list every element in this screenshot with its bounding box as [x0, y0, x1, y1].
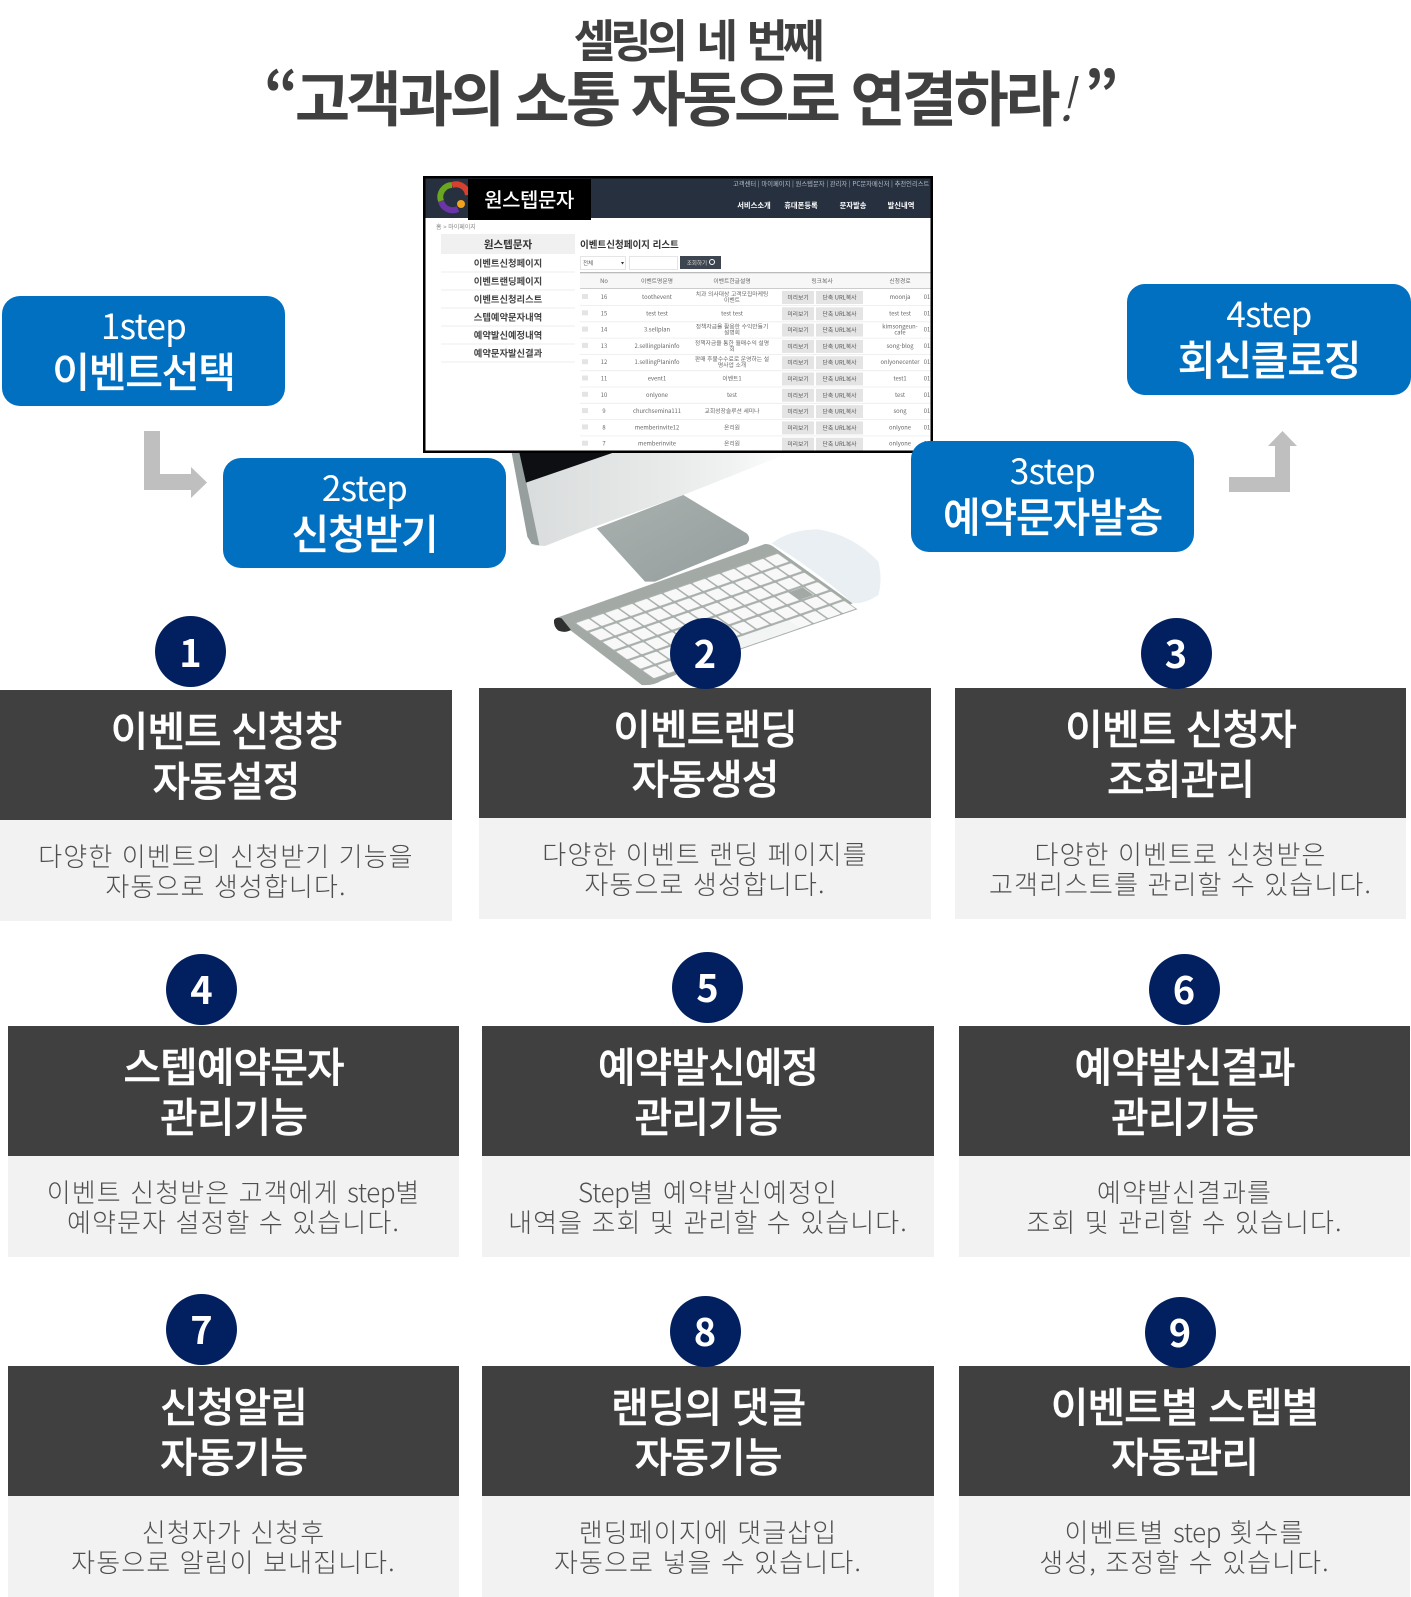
step 1 box: [2, 296, 285, 406]
sidebar: 이벤트신청리스트: [474, 292, 543, 306]
number badge 9: [1144, 1296, 1216, 1368]
breadcrumb: 홈 > 마이페이지: [436, 222, 476, 231]
heading 3: 이벤트 신청자: [1065, 696, 1296, 756]
main menu: 휴대폰등록: [784, 201, 818, 211]
heading 6: [959, 1026, 1410, 1156]
sidebar: 이벤트신청페이지: [474, 256, 542, 270]
heading 1: 자동설정: [153, 748, 299, 808]
feature card 9: [959, 1297, 1410, 1597]
number badge 2: [670, 618, 740, 688]
number badge 1: [155, 616, 226, 686]
main menu: 문자발송: [840, 201, 867, 211]
table rows: 단축 URL복사: [823, 309, 857, 318]
table rows: 미리보기: [787, 309, 809, 318]
table rows: 미리보기: [787, 390, 809, 399]
description 9: 생성, 조정할 수 있습니다.: [1039, 1543, 1330, 1580]
table rows: test1: [893, 374, 907, 382]
main menu: 발신내역: [888, 201, 914, 211]
table rows: 01: [924, 406, 930, 415]
step 4 box: 회신클로징: [1178, 327, 1360, 387]
logo label: [468, 179, 591, 220]
list heading: 이벤트신청페이지 리스트: [580, 237, 679, 251]
table rows: 11: [601, 374, 607, 382]
table rows: 판매 후불수수료로 운영하는 설: [695, 354, 769, 363]
feature card 5: [482, 952, 934, 1257]
heading 1: [0, 690, 452, 820]
header bar: [425, 178, 931, 220]
table rows: kimsongeun-: [882, 322, 918, 331]
description 4: [8, 1156, 459, 1257]
number badge 1: 1: [179, 622, 202, 678]
table rows: 01: [924, 439, 930, 448]
number badge 4: [166, 954, 237, 1024]
heading 4: [8, 1026, 459, 1156]
table rows: test: [727, 390, 738, 399]
table rows: 8: [602, 422, 606, 431]
description 6: [959, 1156, 1410, 1257]
logo label: 원스텝문자: [484, 184, 574, 213]
table rows: 온리원: [724, 422, 740, 431]
table rows: 온리원: [724, 439, 740, 448]
table header: 링크복사: [811, 276, 833, 285]
table rows: memberinvite: [638, 439, 676, 448]
step 3 box: 예약문자발송: [943, 484, 1162, 544]
number badge 3: [1140, 618, 1212, 688]
feature card 1: [0, 616, 452, 921]
mouse: [772, 529, 880, 603]
description 2: [479, 818, 931, 919]
step 2 box: [223, 458, 506, 568]
description 1: 다양한 이벤트의 신청받기 기능을: [38, 837, 414, 874]
table header: 이벤트명문명: [641, 276, 673, 285]
description 4: 이벤트 신청받은 고객에게 step별: [47, 1173, 420, 1210]
heading 2: 이벤트랜딩: [613, 696, 797, 756]
number badge 7: 7: [190, 1300, 213, 1354]
table rows: 단축 URL복사: [823, 439, 857, 448]
subtitle: 셀링의 네 번째: [574, 5, 819, 70]
table rows: 미리보기: [787, 341, 809, 350]
top links: 고객센터 | 마이페이지 | 원스텝문자 | 관리자 | PC문자메신저 | 추천인리스트: [733, 179, 930, 188]
description 4: 예약문자 설정할 수 있습니다.: [67, 1203, 400, 1240]
heading 7: [8, 1366, 459, 1496]
main menu: 서비스소개: [737, 201, 771, 211]
heading 8: 자동기능: [635, 1424, 781, 1484]
step 3 box: [911, 441, 1194, 552]
heading 4: 관리기능: [160, 1084, 307, 1144]
table rows: 15: [601, 308, 607, 317]
table header: [580, 272, 931, 289]
feature card 8: [482, 1296, 934, 1597]
number badge 2: 2: [694, 624, 716, 678]
table rows: 01: [924, 308, 930, 317]
heading 5: [482, 1026, 934, 1156]
description 6: 예약발신결과를: [1097, 1173, 1272, 1210]
table rows: 미리보기: [787, 292, 809, 302]
table rows: 치과 의사대상 고객모집마케팅: [696, 289, 768, 298]
table rows: 단축 URL복사: [823, 407, 857, 416]
number badge 6: [1148, 954, 1220, 1024]
table rows: test test: [721, 308, 744, 317]
sidebar: 예약문자발신결과: [474, 346, 543, 360]
heading 7: 신청알림: [160, 1374, 307, 1434]
arrow: step 3 to step 4: [1229, 431, 1297, 492]
table rows: 정책자금을 통한 월매수익 설명: [695, 338, 769, 347]
table rows: 2.sellingplaninfo: [635, 341, 680, 350]
heading 6: 관리기능: [1111, 1084, 1258, 1144]
icon: logo ring: [440, 184, 468, 210]
heading 3: [955, 688, 1406, 818]
monitor screen bezel: [519, 453, 613, 483]
description 7: 자동으로 알림이 보내집니다.: [71, 1543, 396, 1580]
title: [264, 5, 1115, 139]
table rows: 회: [729, 344, 735, 353]
heading 3: 조회관리: [1107, 746, 1254, 806]
table rows: 교회성장솔루션 세미나: [705, 406, 760, 415]
table rows: 16: [601, 292, 607, 301]
number badge 8: 8: [694, 1302, 716, 1356]
table rows: onlyonecenter: [880, 357, 920, 366]
table rows: 명사업 소개: [718, 360, 746, 369]
number badge 9: 9: [1169, 1302, 1191, 1358]
sidebar: 예약발신예정내역: [474, 328, 542, 342]
table rows: 7: [602, 439, 606, 448]
table rows: 01: [924, 357, 930, 366]
table rows: churchsemina111: [633, 406, 681, 415]
heading 7: 자동기능: [160, 1424, 307, 1484]
table rows: 설명회: [724, 328, 740, 337]
description 6: 조회 및 관리할 수 있습니다.: [1026, 1203, 1343, 1240]
screenshot: admin page: [423, 176, 933, 453]
table rows: 01: [924, 390, 930, 399]
table rows: 12: [601, 357, 607, 366]
table rows: 01: [924, 292, 930, 301]
description 7: [8, 1496, 459, 1597]
number badge 7: [166, 1294, 237, 1364]
step 1 box: 이벤트선택: [52, 339, 235, 399]
main menu: [737, 201, 914, 211]
feature card 7: [8, 1294, 459, 1597]
table rows: 13: [601, 341, 607, 350]
table rows: 미리보기: [787, 325, 809, 334]
description 3: 다양한 이벤트로 신청받은: [1034, 835, 1326, 872]
monitor stand: [597, 495, 749, 582]
feature card 2: [479, 618, 931, 919]
description 3: [955, 818, 1406, 919]
step 3 box: 3step: [1010, 444, 1095, 495]
table rows: test: [895, 390, 906, 399]
number badge 4: 4: [190, 960, 213, 1014]
feature card 3: [955, 618, 1406, 919]
table rows: test test: [646, 308, 669, 317]
table header: 신청경로: [889, 276, 911, 285]
description 9: 이벤트별 step 횟수를: [1064, 1513, 1305, 1550]
description 3: 고객리스트를 관리할 수 있습니다.: [989, 865, 1372, 902]
table rows: 1.sellingPlaninfo: [634, 357, 680, 366]
number badge 8: [670, 1296, 740, 1366]
heading 1: 이벤트 신청창: [111, 698, 341, 758]
description 9: [959, 1496, 1410, 1597]
heading 8: 랜딩의 댓글: [611, 1374, 805, 1434]
table rows: 미리보기: [787, 374, 809, 383]
table rows: 단축 URL복사: [823, 390, 857, 399]
table rows: 정책자금을 활용한 수익만들기: [696, 322, 768, 331]
description 7: 신청자가 신청후: [142, 1513, 325, 1550]
table rows: 이벤트: [724, 295, 741, 304]
step 2 box: 2step: [322, 461, 407, 512]
number badge 5: 5: [696, 958, 719, 1012]
step 4 box: [1127, 284, 1411, 395]
description 5: 내역을 조회 및 관리할 수 있습니다.: [508, 1203, 908, 1240]
table header: No: [600, 276, 608, 285]
table rows: 10: [601, 390, 607, 399]
table rows: memberinvite12: [635, 422, 679, 431]
table rows: 단축 URL복사: [823, 325, 857, 334]
illustration: desktop computer with keyboard and mouse: [512, 453, 880, 686]
sidebar: 이벤트랜딩페이지: [474, 274, 542, 288]
search controls: 조회하기: [687, 259, 707, 267]
table rows: 단축 URL복사: [823, 292, 857, 302]
table rows: 01: [924, 341, 930, 350]
table rows: song-blog: [886, 341, 914, 350]
heading 5: 관리기능: [635, 1084, 781, 1144]
table header: 이벤트한글설명: [713, 276, 751, 285]
table rows: 미리보기: [787, 407, 809, 416]
table rows: 01: [924, 422, 930, 431]
table rows: 단축 URL복사: [823, 341, 857, 350]
table rows: cafe: [894, 328, 906, 337]
heading 9: 자동관리: [1111, 1424, 1258, 1484]
feature card 4: [8, 954, 459, 1257]
table rows: 단축 URL복사: [823, 358, 857, 367]
number badge 3: 3: [1165, 624, 1187, 678]
heading 8: [482, 1366, 934, 1496]
heading 2: 자동생성: [632, 746, 778, 806]
table rows: 이벤트1: [722, 374, 742, 382]
description 8: [482, 1496, 934, 1597]
table rows: onlyone: [889, 439, 911, 448]
heading 9: [959, 1366, 1410, 1496]
table rows: onlyone: [646, 390, 668, 399]
heading 9: 이벤트별 스텝별: [1051, 1374, 1318, 1434]
heading 4: 스텝예약문자: [123, 1034, 344, 1094]
description 8: 랜딩페이지에 댓글삽입: [579, 1513, 837, 1550]
arrow: step 1 to step 2: [144, 431, 207, 498]
step 1 box: 1step: [101, 299, 186, 350]
sidebar: [441, 234, 575, 362]
table rows: 01: [924, 374, 930, 382]
description 1: 자동으로 생성합니다.: [105, 867, 347, 904]
table rows: 미리보기: [787, 423, 809, 432]
sidebar: 스텝예약문자내역: [474, 310, 542, 324]
number badge 5: [672, 952, 743, 1022]
description 5: [482, 1156, 934, 1257]
heading 5: 예약발신예정: [598, 1034, 818, 1094]
description 8: 자동으로 넣을 수 있습니다.: [554, 1543, 862, 1580]
sidebar: 원스텝문자: [484, 237, 532, 252]
table rows: 단축 URL복사: [823, 374, 857, 383]
table rows: 3.sellplan: [644, 325, 671, 334]
table rows: song: [893, 406, 907, 415]
step 2 box: 신청받기: [291, 501, 438, 561]
table rows: 9: [602, 406, 606, 415]
table rows: 01: [924, 325, 930, 334]
table rows: 14: [601, 325, 608, 334]
keyboard: [554, 544, 857, 685]
description 2: 다양한 이벤트 랜딩 페이지를: [542, 835, 868, 872]
description 2: 자동으로 생성합니다.: [584, 865, 826, 902]
table rows: toothevent: [642, 292, 673, 301]
table rows: 미리보기: [787, 358, 809, 367]
main headline: “고객과의 소통 자동으로 연결하라! ”: [264, 52, 1115, 139]
heading 2: [479, 688, 931, 818]
search controls: 전체: [583, 259, 593, 267]
heading 6: 예약발신결과: [1074, 1034, 1295, 1094]
table rows: test test: [889, 308, 912, 317]
feature card 6: [959, 954, 1410, 1257]
table rows: onlyone: [889, 422, 911, 431]
table rows: moonja: [890, 292, 910, 301]
table rows: 미리보기: [787, 439, 809, 448]
table rows: event1: [648, 374, 666, 382]
search controls: [580, 256, 721, 270]
description 1: [0, 820, 452, 921]
step 4 box: 4step: [1226, 287, 1312, 338]
table rows: [580, 289, 931, 451]
number badge 6: 6: [1173, 960, 1195, 1014]
description 5: Step별 예약발신예정인: [578, 1173, 838, 1210]
table rows: 단축 URL복사: [823, 423, 857, 432]
monitor body: [512, 453, 790, 546]
